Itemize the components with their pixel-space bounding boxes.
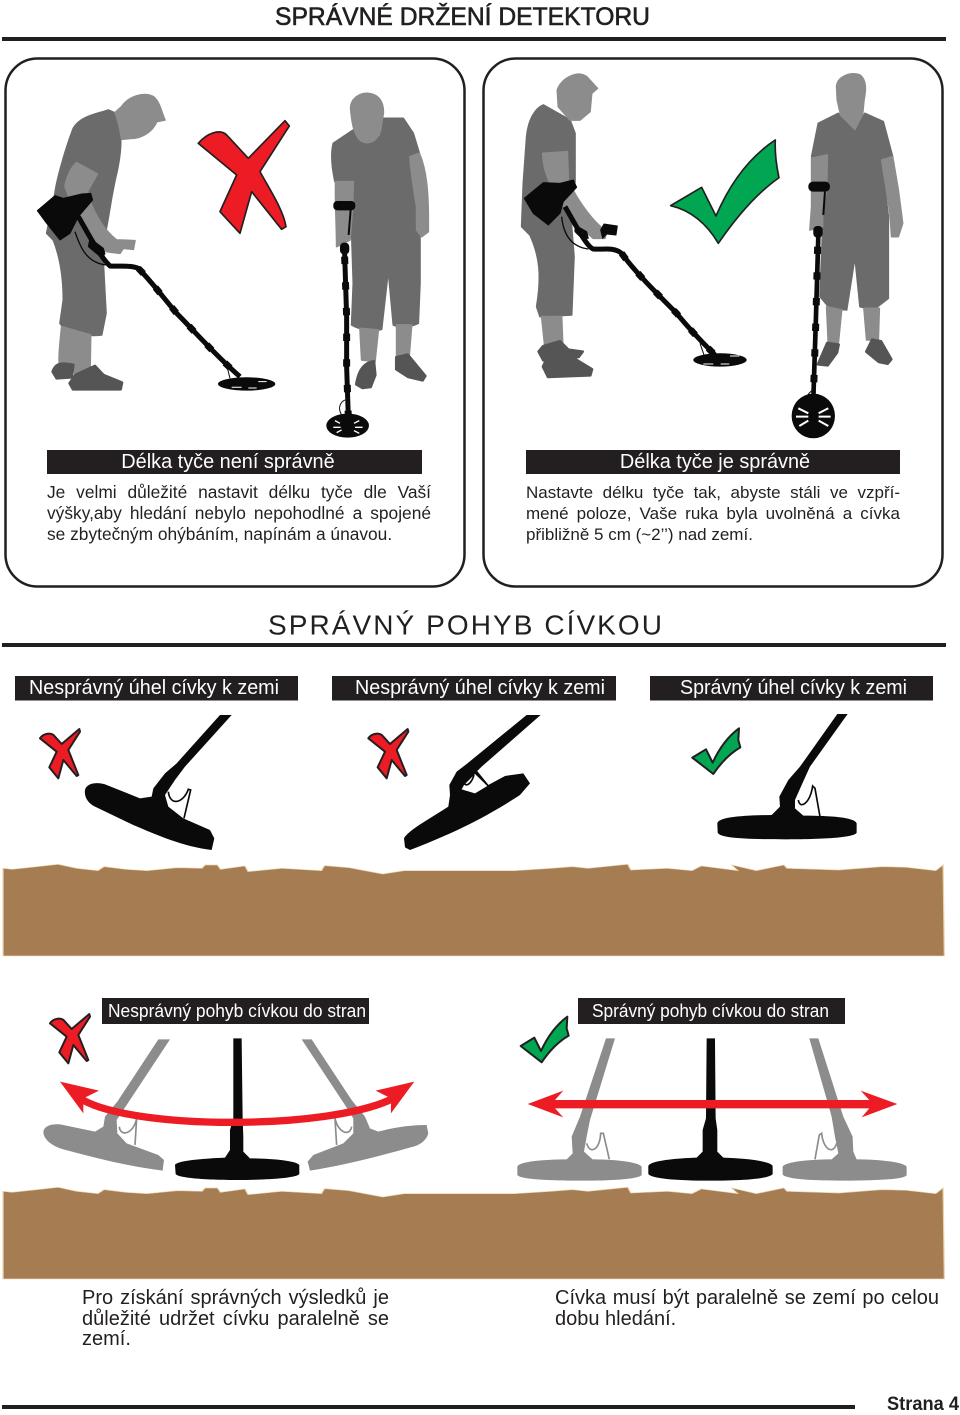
label: correct angle: Správný úhel cívky k zemi — [680, 676, 907, 699]
text: parallel advice left: důležité udržet cívku paralelně se — [82, 1308, 389, 1330]
panel: correct detector length — [484, 58, 942, 586]
label: wrong angle two: Nesprávný úhel cívky k zemi — [355, 676, 605, 699]
figure: bent man front view — [326, 93, 428, 438]
text: wrong length note: Je velmi důležité nastavit délku tyče dle Vaší — [47, 482, 431, 502]
text: parallel advice left — [82, 1287, 389, 1350]
figure: upright man side view — [522, 74, 747, 377]
text: parallel advice right: dobu hledání. — [555, 1308, 676, 1330]
text: correct length note: mené poloze, Vaše ruka byla uvolněná a cívka — [526, 504, 900, 523]
coil black centre — [648, 1038, 773, 1181]
figure: bent man side view — [37, 95, 275, 391]
label: wrong length — [47, 450, 422, 474]
coil grey left — [43, 1039, 170, 1171]
arrow: straight red — [528, 1091, 897, 1117]
label: wrong side motion: Nesprávný pohyb cívkou do stran — [108, 1001, 366, 1021]
coil black centre — [175, 1038, 299, 1180]
coil grey left — [517, 1038, 642, 1181]
icon: small green check — [521, 1017, 569, 1062]
label: wrong angle one: Nesprávný úhel cívky k zemi — [29, 676, 279, 699]
text: parallel advice right: Cívka musí být paralelně se zemí po celou — [555, 1287, 939, 1309]
text: correct length note — [526, 483, 900, 544]
text: wrong length note: se zbytečným ohýbáním, napínám a únavou. — [47, 524, 392, 544]
label: correct length — [526, 450, 900, 474]
label: wrong length: Délka tyče není správně — [121, 451, 335, 473]
coil grey right — [302, 1039, 428, 1171]
ground strip upper — [3, 864, 944, 956]
text: wrong length note — [47, 482, 431, 544]
icon: large red cross — [198, 121, 289, 233]
text: parallel advice left: zemí. — [82, 1328, 131, 1350]
diagram: coil tilted toe down, wrong — [368, 715, 541, 850]
label: correct side motion: Správný pohyb cívkou do stran — [592, 1001, 829, 1021]
text: correct length note: přibližně 5 cm (~2’’) nad zemí. — [526, 525, 753, 544]
text: parallel advice left: Pro získání správných výsledků je — [82, 1287, 389, 1309]
panel: wrong detector length — [6, 58, 464, 586]
arrow: curved red — [60, 1082, 414, 1122]
icon: small red cross — [50, 1014, 90, 1063]
text: correct length note: Nastavte délku tyče tak, abyste stáli ve vzpří- — [526, 483, 900, 502]
figure: upright man front view — [792, 74, 903, 438]
text: parallel advice right — [555, 1287, 939, 1330]
heading: coil motion: SPRÁVNÝ POHYB CÍVKOU — [268, 610, 662, 640]
page number: Strana 4 — [887, 1394, 959, 1415]
title: SPRÁVNÉ DRŽENÍ DETEKTORU — [275, 2, 650, 31]
label: correct length: Délka tyče je správně — [620, 451, 810, 473]
diagram: coil tilted toe up, wrong — [40, 715, 232, 850]
ground strip lower — [3, 1187, 944, 1279]
diagram: arc sweep, wrong — [43, 1014, 428, 1180]
text: wrong length note: výšky,aby hledání nebylo nepohodlné a spojené — [47, 503, 431, 523]
coil grey right — [783, 1038, 907, 1181]
diagram: straight sweep, correct — [517, 1017, 907, 1181]
icon: large green check mark — [671, 140, 779, 243]
diagram: coil parallel, correct — [692, 714, 857, 839]
